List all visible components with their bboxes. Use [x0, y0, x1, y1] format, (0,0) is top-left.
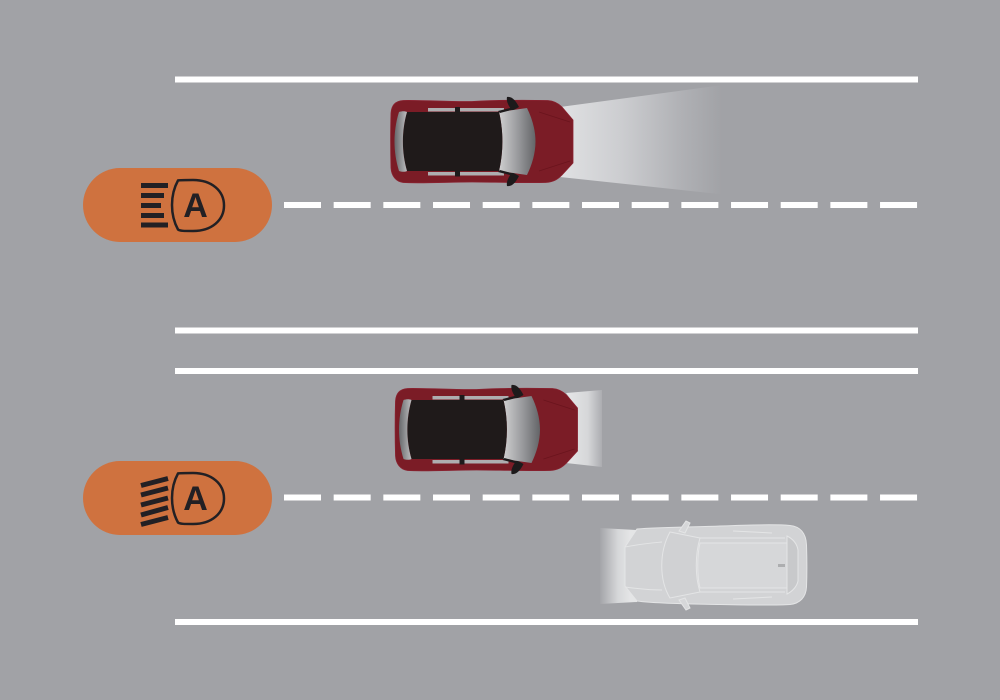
- headlamp outline: [172, 473, 224, 524]
- bottom road: upper edge line: [175, 368, 918, 374]
- oncoming car headlight glow: [600, 528, 637, 604]
- top road: lower edge line: [175, 328, 918, 334]
- side mirror bottom: [511, 460, 524, 474]
- side window top: [432, 396, 508, 400]
- side window bottom: [432, 460, 508, 464]
- indicator pill: auto high beam: [83, 168, 272, 242]
- black roof: [403, 112, 502, 171]
- letter A: A: [183, 187, 208, 225]
- side mirror bottom: [679, 598, 690, 610]
- short low beam light, bottom red car: [566, 390, 602, 467]
- oncoming white car: [625, 521, 807, 610]
- side mirror top: [679, 521, 690, 533]
- straight beam lines: [141, 183, 168, 228]
- bottom road: dashed centre line: [284, 494, 918, 500]
- headlamp outline: [172, 180, 224, 231]
- pillars: [455, 107, 515, 176]
- hood lines: [625, 542, 662, 590]
- top road: dashed centre line: [284, 202, 918, 208]
- red car, low beam scene: [395, 385, 578, 474]
- red car, high beam scene: [391, 97, 573, 186]
- side window bottom: [428, 172, 504, 176]
- car body: [625, 525, 807, 605]
- orange pill: [83, 461, 272, 535]
- pillars: [460, 395, 520, 464]
- indicator pill: auto low beam: [83, 461, 272, 535]
- rear window: [787, 536, 798, 594]
- angled beam lines: [141, 478, 168, 524]
- orange pill: [83, 168, 272, 242]
- car body: [391, 100, 573, 183]
- rear window: [394, 111, 407, 172]
- letter A: A: [183, 480, 208, 518]
- side mirror top: [507, 97, 519, 111]
- bottom road: lower edge line: [175, 619, 918, 625]
- black roof: [407, 400, 507, 459]
- side mirror top: [511, 385, 524, 399]
- car body: [395, 388, 578, 471]
- windshield: [662, 532, 700, 598]
- hood creases: [544, 400, 574, 459]
- rear badge: [778, 564, 785, 567]
- side mirror bottom: [507, 172, 519, 186]
- roof rails: [700, 531, 785, 599]
- windshield: [504, 396, 540, 463]
- hood creases: [539, 112, 570, 171]
- rear window: [399, 399, 412, 460]
- high beam light cone: [560, 85, 740, 197]
- windshield: [499, 108, 536, 175]
- top road: upper edge line: [175, 76, 918, 82]
- roof: [698, 543, 787, 588]
- side window top: [428, 108, 504, 112]
